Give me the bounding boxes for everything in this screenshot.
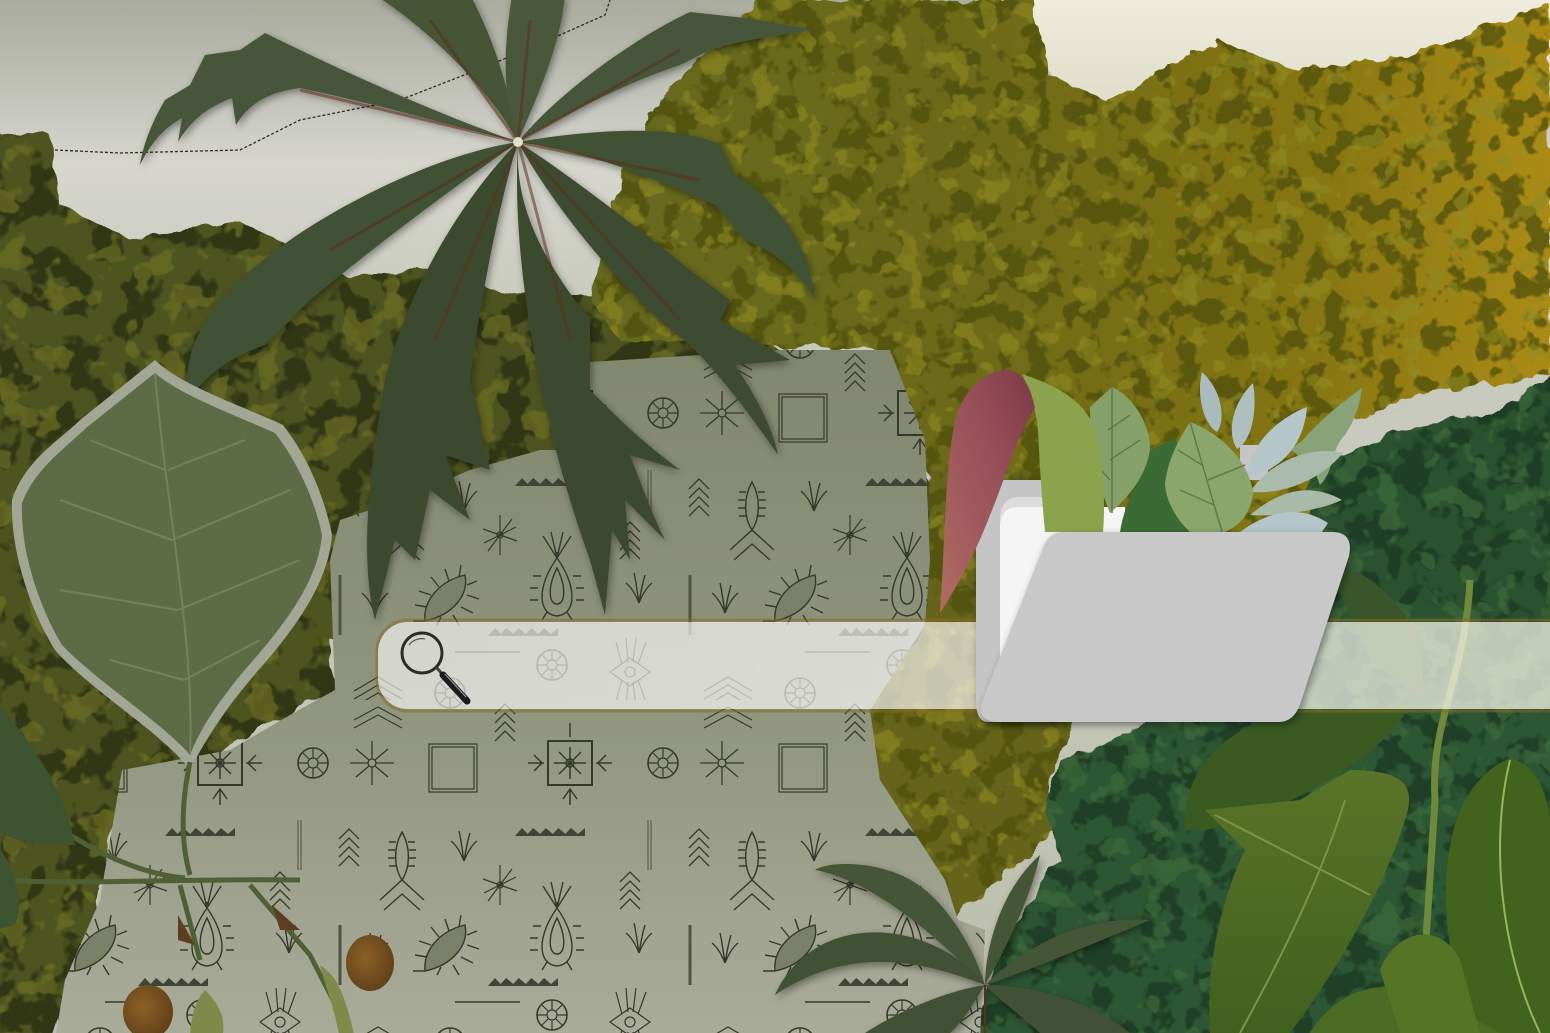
seed right	[346, 935, 394, 991]
leaf middle	[1205, 770, 1409, 1033]
leaf upper	[1185, 705, 1410, 830]
leaflet north	[506, 0, 565, 142]
stem	[1420, 580, 1470, 1033]
serrated leaf centre	[1165, 422, 1253, 532]
leaflet north-east	[518, 12, 815, 142]
buds	[178, 905, 300, 945]
leaf veins	[60, 373, 300, 755]
leaf centre	[513, 137, 523, 147]
folder tab shade	[1000, 497, 1060, 640]
leaflet west lower	[187, 142, 518, 400]
pale blue leaves	[1200, 372, 1222, 432]
plant: big round leaf left	[0, 360, 350, 1033]
leaflet east	[518, 131, 815, 300]
bouquet behind folder front	[940, 370, 1362, 613]
seed left	[123, 985, 173, 1033]
plant: rubber leaves bottom right	[1185, 568, 1550, 1033]
leaf right midrib	[1500, 760, 1540, 1033]
bar glow outline	[377, 620, 1550, 711]
foliage: dark olive forest left	[0, 130, 960, 1033]
paper sheet	[1000, 507, 1125, 680]
foliage: canopy drip below bar	[865, 470, 1080, 920]
sky strip at right	[1300, 370, 1550, 470]
folder front	[981, 532, 1350, 722]
leaf midrib	[1215, 800, 1370, 1033]
leaflet south	[517, 142, 680, 615]
leaflet north-west	[375, 0, 518, 142]
leaflet south-west	[367, 142, 518, 620]
serrated leaf left	[1090, 387, 1150, 513]
leaf behind bar right	[1330, 568, 1425, 700]
plant: seed pods	[123, 905, 394, 1033]
pod	[190, 965, 355, 1033]
plant: large palmate leaf top	[140, 0, 815, 620]
leaf bottom centre	[1380, 935, 1480, 1033]
foliage: green forest lower right	[970, 700, 1550, 1033]
leaflet west	[140, 33, 518, 165]
leaflet south-east	[518, 142, 790, 455]
foliage: yellow olive canopy	[590, 0, 1550, 560]
icon: magnifying glass	[402, 633, 467, 701]
plant: dark leaves far left	[0, 700, 75, 930]
leaf stem and branch	[0, 762, 350, 1033]
foliage: green forest right upper	[1300, 370, 1550, 720]
torn paper edge line	[55, 0, 610, 153]
leaf halo	[12, 360, 332, 770]
panel: patterned background	[55, 350, 985, 1033]
background: bright sky upper right	[1000, 0, 1550, 130]
plant: small palmate leaf bottom centre	[775, 855, 1150, 1033]
dark centre leaves	[1120, 438, 1210, 532]
fern frond	[1290, 388, 1362, 485]
leaf blade	[22, 373, 322, 755]
search bar	[377, 620, 1550, 711]
bar fill	[378, 622, 1550, 709]
green leaf strap	[1022, 374, 1104, 532]
back sheet right	[1240, 445, 1268, 480]
leaf right	[1446, 758, 1550, 1033]
leaf bottom	[1310, 987, 1500, 1033]
leaf ribs	[300, 20, 700, 340]
folder back	[976, 480, 1060, 722]
red leaf	[940, 370, 1035, 613]
folder with plants	[940, 370, 1362, 722]
